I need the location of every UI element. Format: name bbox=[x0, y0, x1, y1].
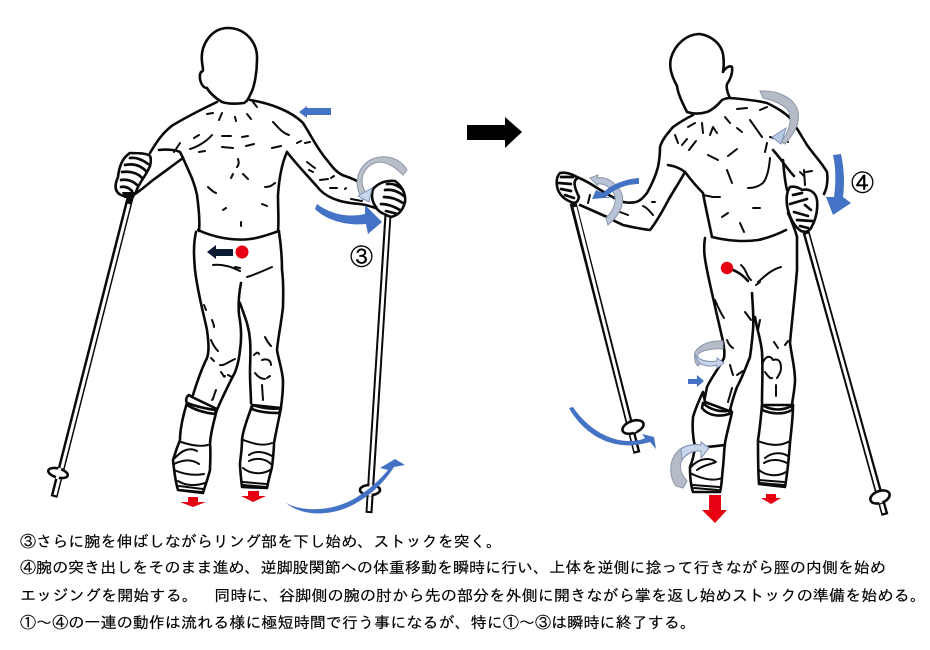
torso and arms bbox=[150, 102, 217, 153]
chest muscle marks bbox=[174, 102, 362, 226]
arrow: black transition arrow bbox=[467, 117, 522, 148]
right figure left pole bbox=[573, 203, 645, 453]
arrow: blue shoulder arrow left figure bbox=[299, 106, 331, 118]
arrow: knee rotation bbox=[695, 341, 724, 368]
line 2: ④腕の突き出しをそのまま進め、逆脚股関節への体重移動を瞬時に行い、上体を逆側に捻って行きながら脛の内側を始め bbox=[20, 559, 886, 577]
left pole (viewer's left) bbox=[47, 194, 131, 497]
muscle marks bbox=[588, 107, 788, 232]
line 1: ③さらに腕を伸ばしながらリング部を下し始め、ストックを突く。 bbox=[20, 533, 502, 551]
hand right bbox=[372, 181, 405, 217]
line 4: ①～④の一連の動作は流れる様に極短時間で行う事になるが、特に①～③は瞬時に終了する。 bbox=[20, 614, 696, 632]
torso and arms bbox=[730, 98, 827, 194]
line 3: エッジングを開始する。 同時に、谷脚側の腕の肘から先の部分を外側に開きながら掌を返し始めストックの準備を始める。 bbox=[20, 587, 926, 605]
right boot bbox=[240, 405, 281, 488]
hip dot with crease bbox=[721, 262, 748, 281]
left skier figure bbox=[47, 28, 405, 513]
head bbox=[670, 34, 732, 114]
arrow: boot rotation bbox=[671, 442, 709, 488]
left boot bbox=[173, 395, 217, 493]
right skier figure bbox=[557, 34, 891, 515]
arrow: blue curve ring motion bbox=[286, 459, 405, 513]
hand left bbox=[557, 173, 579, 203]
arrow: big red down bbox=[702, 495, 727, 523]
head bbox=[200, 28, 257, 104]
arrow: blue curve ring motion right figure bbox=[569, 407, 656, 449]
arrow: red down right foot bbox=[241, 491, 266, 502]
arrow: navy hip arrow bbox=[207, 245, 233, 259]
arrow: blue arm arrow 4 bbox=[826, 154, 851, 215]
left boot bbox=[690, 392, 732, 492]
right pole (viewer's right) bbox=[360, 214, 388, 513]
arrow: small blue knee arrow bbox=[688, 375, 704, 387]
right boot bbox=[758, 405, 793, 487]
legs bbox=[193, 232, 208, 395]
hand right bbox=[787, 187, 817, 232]
red dot: left hip bbox=[236, 246, 248, 258]
arrow: red down left foot bbox=[180, 497, 206, 507]
arrow: blue curved arm arrow left figure bbox=[315, 204, 382, 234]
hand left bbox=[116, 153, 151, 198]
right figure right pole bbox=[806, 232, 891, 515]
legs bbox=[704, 238, 724, 402]
waist line bbox=[712, 230, 786, 241]
waist line bbox=[198, 230, 279, 240]
arrow: small red down bbox=[761, 494, 781, 504]
explanation text bbox=[20, 533, 926, 632]
arrow: forearm rotation bbox=[590, 175, 639, 225]
arrow: grey shoulder rotation bbox=[760, 91, 798, 144]
label: circled 3: ③ bbox=[350, 244, 373, 270]
arrow: grey wrist rotation left figure bbox=[357, 157, 407, 202]
label: circled 4: ④ bbox=[851, 170, 874, 196]
